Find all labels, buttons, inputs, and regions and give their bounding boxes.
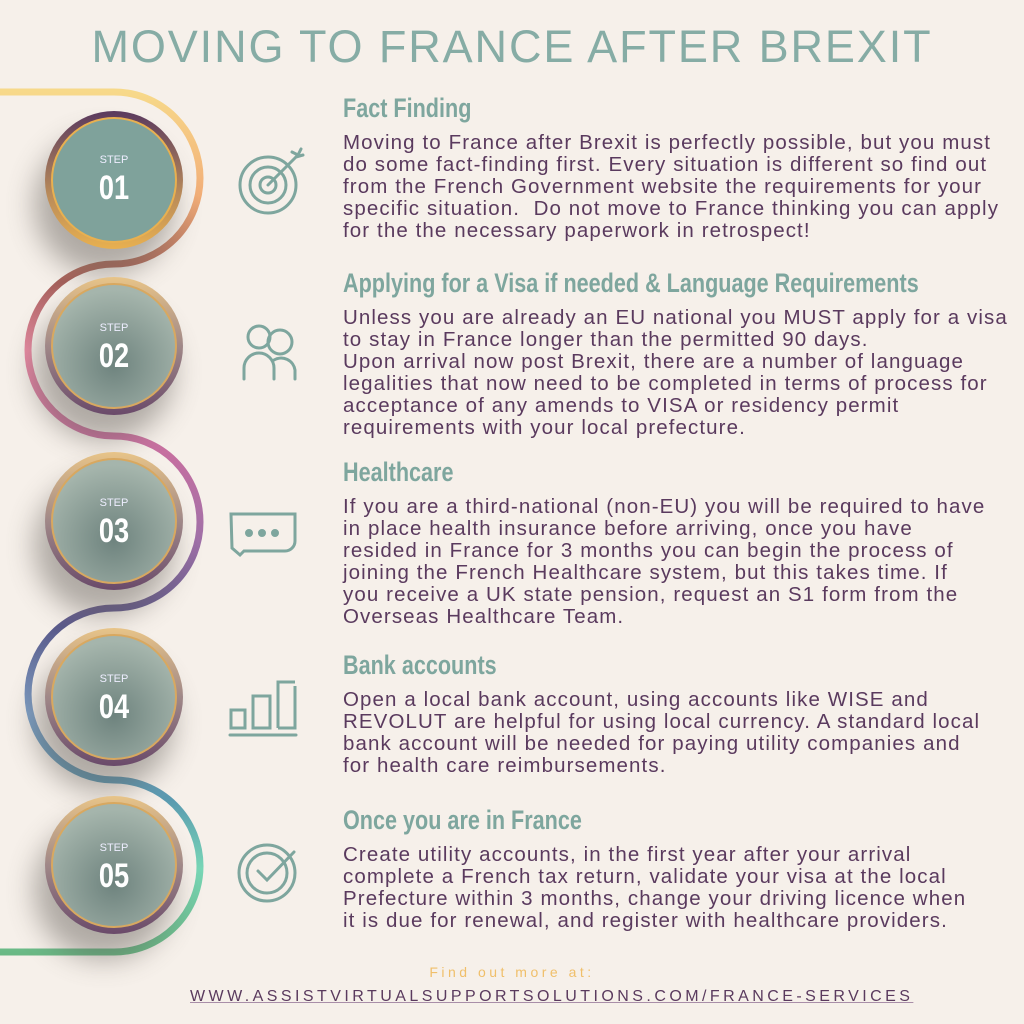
footer label: Find out more at: — [429, 964, 595, 980]
section 4: bank accounts: Open a local bank account, using accounts like WISE and — [343, 688, 929, 711]
step 04: 04 — [99, 687, 129, 726]
section 2: visa: legalities that now need to be completed in terms of process for — [343, 372, 988, 395]
section 4: bank accounts — [343, 650, 980, 777]
section 1: fact finding: from the French Government website the requirements for your — [343, 175, 982, 198]
section 1: fact finding: Moving to France after Brexit is perfectly possible, but you must — [343, 131, 991, 154]
icon: check circle — [239, 845, 295, 901]
section 5: once in france: complete a French tax return, validate your visa at the local — [343, 865, 947, 888]
section 3: healthcare: joining the French Healthcare system, but this takes time. If — [343, 561, 948, 584]
section 2: visa: Upon arrival now post Brexit, there are a number of language — [343, 350, 964, 373]
section 2: visa: requirements with your local prefecture. — [343, 416, 746, 439]
section 3: healthcare: you receive a UK state pension, request an S1 form from the — [343, 583, 958, 606]
section 4: bank accounts: bank account will be needed for paying utility companies and — [343, 732, 961, 755]
section 5: once in france: it is due for renewal, and register with healthcare providers. — [343, 909, 948, 932]
icon: people — [244, 326, 295, 379]
step 04: STEP — [100, 673, 128, 685]
section 5: once in france — [343, 805, 966, 932]
section 3: healthcare: Overseas Healthcare Team. — [343, 605, 624, 628]
section 3: healthcare: resided in France for 3 months you can begin the process of — [343, 539, 954, 562]
step 01: STEP — [100, 154, 128, 166]
section 1: fact finding: do some fact-finding first. Every situation is different so find out — [343, 153, 987, 176]
step 03 — [34, 452, 183, 616]
section 2: visa: Applying for a Visa if needed & Language Requirements — [343, 268, 919, 298]
step 02: 02 — [99, 336, 129, 375]
step 01 — [34, 111, 183, 275]
section 5: once in france: Once you are in France — [343, 805, 582, 835]
section 2: visa: to stay in France longer than the permitted 90 days. — [343, 328, 869, 351]
section 4: bank accounts: Bank accounts — [343, 650, 497, 680]
section 4: bank accounts: for health care reimbursements. — [343, 754, 667, 777]
step 05 — [34, 796, 183, 960]
step 04 — [34, 628, 183, 792]
icon: target — [240, 149, 303, 213]
section 1: fact finding — [343, 93, 999, 242]
section 3: healthcare: If you are a third-national (non-EU) you will be required to have — [343, 495, 985, 518]
section 1: fact finding: specific situation. Do not move to France thinking you can apply — [343, 197, 999, 220]
section 3: healthcare: Healthcare — [343, 457, 453, 487]
section 3: healthcare: in place health insurance before arriving, once you have — [343, 517, 913, 540]
icon: chat bubble — [231, 514, 295, 555]
section 5: once in france: Prefecture within 3 months, change your driving licence when — [343, 887, 966, 910]
step 03: STEP — [100, 497, 128, 509]
section 2: visa: acceptance of any amends to VISA or residency permit — [343, 394, 899, 417]
step 02: STEP — [100, 322, 128, 334]
icon: bar chart — [230, 682, 296, 735]
section 3: healthcare — [342, 457, 985, 628]
step 02 — [34, 277, 183, 441]
step 01: 01 — [99, 168, 129, 207]
footer url: WWW.ASSISTVIRTUALSUPPORTSOLUTIONS.COM/FRANCE-SERVICES — [190, 988, 913, 1005]
section 1: fact finding: for the the necessary paperwork in retrospect! — [343, 219, 811, 242]
timeline graphic — [0, 88, 304, 976]
step 05: 05 — [99, 856, 129, 895]
section 4: bank accounts: REVOLUT are helpful for using local currency. A standard local — [343, 710, 980, 733]
step 03: 03 — [99, 511, 129, 550]
section 1: fact finding: Fact Finding — [343, 93, 471, 123]
section 2: visa — [343, 268, 1008, 439]
step 05: STEP — [100, 842, 128, 854]
section 2: visa: Unless you are already an EU national you MUST apply for a visa — [343, 306, 1008, 329]
section 5: once in france: Create utility accounts, in the first year after your arrival — [343, 843, 911, 866]
title: MOVING TO FRANCE AFTER BREXIT — [91, 21, 933, 72]
